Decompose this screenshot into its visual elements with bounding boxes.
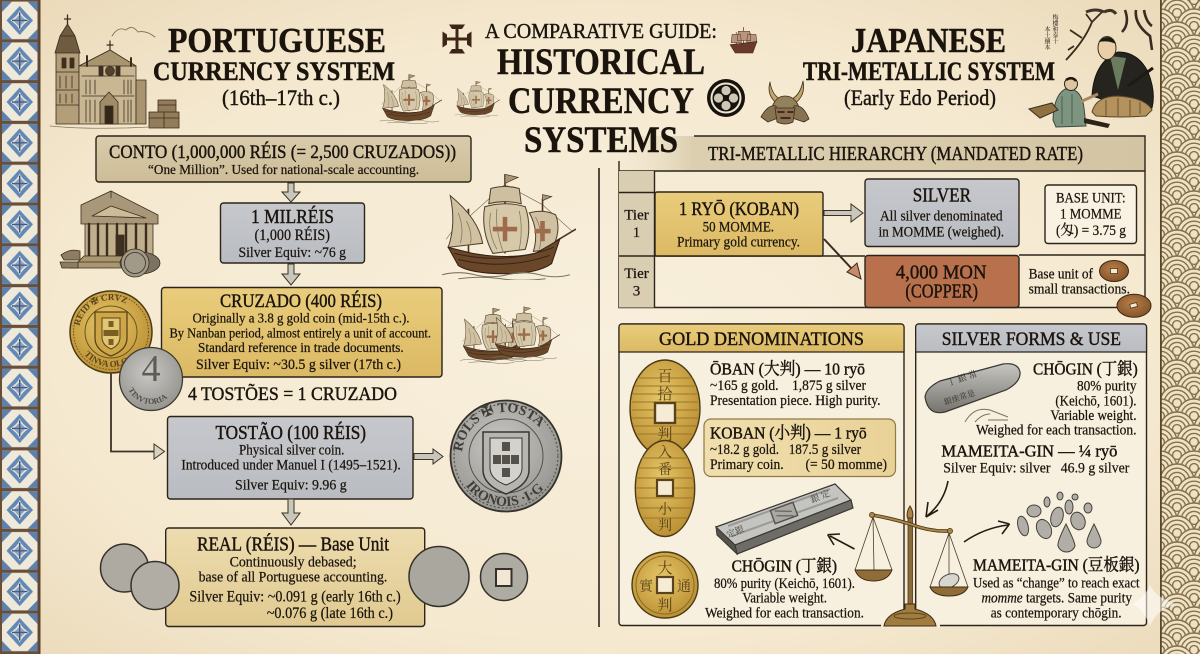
panel: conto: CONTO (1,000,000 RÉIS (= 2,500 CRUZADOS)) [109,141,456,163]
base unit box: BASE UNIT: [1056,190,1126,206]
icon: round gold coin: 實 [639,579,654,595]
silver box [865,179,1019,246]
tier column [619,171,1145,308]
illustration: large caravel [442,174,576,280]
icon: chogin ingot: 丁 銀 常 [945,368,979,388]
tier column: 1 [633,225,640,241]
icon: worn real coin [409,546,469,606]
icon: chogin ingot [925,364,1020,413]
panel: real: Silver Equiv: ~0.091 g (early 16th c.) [189,589,401,606]
panel: real: ~0.076 g (late 16th c.) [267,605,393,622]
illustration: samurai and merchant ukiyo-e: 本土續本 [1043,25,1050,51]
text: mameita-gin quarter ryo: MAMEITA-GIN — ¼ ryō [941,441,1117,460]
title: Japanese tri-metallic system [803,21,1055,110]
base unit box [1045,185,1136,244]
illustration: samurai and merchant ukiyo-e [1029,10,1153,128]
icon: round gold coin [632,552,698,618]
copper note: small transactions. [1029,281,1130,297]
icon: gold cruzado coin: TINVA OLO [85,350,126,367]
title: Portuguese currency system: (16th–17th c.) [222,85,340,110]
arrow: conto to milreis [282,183,300,202]
text: oban [710,360,880,409]
copper note: Base unit of [1029,266,1093,282]
icon: small sailing ship [455,81,500,117]
text: mameita-gin: momme targets. Same purity [982,591,1133,607]
icon: copper mon coin [1100,260,1128,282]
icon: oban coin: 拾 [657,386,673,403]
text: chogin: Variable weight. [742,591,827,607]
icon: silver chogin bar [716,484,853,554]
main title: HISTORICAL [497,42,705,83]
panel: cruzado: Silver Equiv: ~30.5 g silver (17th c.) [196,357,401,373]
gold panel header: GOLD DENOMINATIONS [659,329,864,350]
text: chogin [705,557,864,621]
base unit box: (匁) = 3.75 g [1056,222,1126,239]
silver panel header [916,324,1146,352]
callout: koban: (= 50 momme) [806,457,887,473]
gold panel header [619,324,904,352]
arrow: scale to silver beads [964,521,1010,542]
text: mameita-gin [973,556,1140,621]
panel: cruzado: CRUZADO (400 RÉIS) [220,290,382,312]
text: chogin: Weighed for each transaction. [705,605,864,621]
icon: chogin ingot: 銀座常是 [943,388,976,407]
panel: tostao: Introduced under Manuel I (1495–1521). [181,458,401,474]
panel: cruzado: Standard reference in trade documents. [198,341,404,356]
icon: koban coin [635,440,695,536]
tier column: Tier [624,266,649,282]
callout: koban: ~18.2 g gold. [710,442,779,458]
arrow: scale to chogin bar [828,534,854,549]
arrow: milreis to cruzado [282,264,300,285]
panel: real: base of all Portuguese accounting. [199,570,387,586]
left azulejo tile border [0,0,40,654]
panel: milreis: Silver Equiv: ~76 g [238,245,346,261]
panel: tostao: TOSTÃO (100 RÉIS) [216,420,366,444]
hierarchy header band: TRI-METALLIC HIERARCHY (MANDATED RATE) [708,143,1083,165]
icon: silver tostao coin: IRONOIS ·I·G [466,480,543,506]
icon: gold cruzado coin: REID ✠ CRVZ [74,294,128,326]
panel: real: Continuously debased; [230,555,357,571]
panel: milreis: 1 MILRÉIS [251,205,334,228]
icon: oban coin: 判 [657,426,673,443]
copper box: 4,000 MON [896,261,986,283]
main title: CURRENCY [508,81,694,122]
panel: silver forms and use [916,324,1146,626]
panel: milreis [220,203,364,263]
panel: gold denominations [619,324,904,626]
icon: copper mon coin lower [1117,294,1151,317]
text: mameita-gin: Used as “change” to reach exact [973,575,1140,591]
icon: four-tostoes silver coin [118,346,184,412]
arrow: gold to silver [824,204,863,222]
text: chogin silver: Variable weight. [1050,408,1136,424]
tier 1 gold koban box: Primary gold currency. [677,235,800,251]
main title: A COMPARATIVE GUIDE: [485,19,717,43]
icon: Japanese mon crest [707,79,745,117]
arrow: tostao to real [282,499,300,525]
callout: koban: Primary coin. [710,457,784,473]
icon: square-holed coin [480,554,528,600]
icon: round gold coin: 判 [657,597,673,614]
icon: cross of the Order of Christ [442,24,472,54]
panel: conto: “One Million”. Used for national-scale accounting. [148,163,419,178]
panel: real: REAL (RÉIS) — Base Unit [197,533,389,556]
title: Japanese tri-metallic system: TRI-METALLIC SYSTEM [803,57,1055,86]
text: chogin silver: CHŌGIN (丁銀) [1033,360,1138,379]
tier 1 gold koban box: 1 RYŌ (KOBAN) [679,199,799,220]
text: mameita-gin: as contemporary chōgin. [991,605,1122,621]
icon: pair of real coins [100,544,179,610]
text: oban: Presentation piece. High purity. [710,393,880,409]
main title: SYSTEMS [524,120,678,161]
callout: koban: KOBAN (小判) — 1 ryō [710,423,867,442]
text: chogin silver [976,360,1138,439]
base unit box: 1 MOMME [1060,207,1122,223]
text: chogin: CHŌGIN (丁銀) [732,557,837,576]
illustration: samurai and merchant ukiyo-e: 梅樓和泰十 [1051,13,1058,45]
text: oban: ŌBAN (大判) — 10 ryō [710,360,865,379]
tier 1 gold koban box [655,192,823,256]
tier column: Tier [624,207,649,223]
icon: gold cruzado coin [69,290,153,374]
panel: conto [96,136,471,182]
icon: koban coin: 入 [658,445,672,461]
panel: milreis: (1,000 RÉIS) [254,225,330,244]
panel: cruzado: Originally a 3.8 g gold coin (mid-15th c.). [192,312,410,327]
hierarchy header band [619,136,1145,308]
icon: round gold coin: 大 [657,560,673,577]
icon: mameita-gin silver beads [1016,492,1101,552]
silver panel header: SILVER FORMS & USE [942,329,1121,350]
icon: silver tostao coin: ROLS ✠ TOSTA [453,402,543,452]
illustration: Portuguese church [50,15,179,128]
right seigaiha wave border [1160,0,1200,654]
text: 4 tostoes equals 1 cruzado: 4 TOSTÕES = 1 CRUZADO [188,383,397,405]
tier column: 3 [633,284,640,300]
arrow: tostao to silver coin [414,449,443,464]
arrow: gold to copper [824,239,861,279]
panel: tostao [168,416,413,499]
copper box: (COPPER) [905,280,978,302]
title: Portuguese currency system: CURRENCY SYSTEM [153,57,395,86]
icon: red-sailed ship [730,27,757,53]
illustration: bank building and coins [60,191,160,277]
callout: koban: 187.5 g silver [789,442,861,458]
silver box: in MOMME (weighed). [879,225,1004,241]
title: Portuguese currency system [153,21,395,110]
arrow: note to scale [926,481,948,517]
tier 1 gold koban box: 50 MOMME. [703,220,774,236]
callout: koban [704,419,896,476]
icon: silver chogin bar: 銀 定 [809,487,832,505]
title: Portuguese currency system: PORTUGUESE [168,21,386,60]
panel: real [166,528,425,626]
title: Japanese tri-metallic system: JAPANESE [851,21,1006,60]
central divider line [598,168,600,627]
icon: silver chogin bar: 定銀 [725,523,745,540]
icon: koban coin: 番 [658,462,672,478]
icon: four-tostoes silver coin: 4 [142,348,160,390]
panel: cruzado: By Nanban period, almost entirely a unit of account. [170,326,431,341]
copper box [865,256,1019,308]
silver box: All silver denominated [880,209,1003,225]
illustration: balance scale [855,506,968,628]
illustration: pair of ships [460,307,560,363]
icon: small sketch below ingot [965,409,1008,422]
main title [485,19,717,161]
icon: round gold coin: 通 [677,579,691,595]
arrow: cruzado coin to tostao [111,372,164,459]
icon: oban coin: 百 [657,368,673,385]
panel: tri-metallic hierarchy [619,136,1151,317]
icon: samurai kabuto helmet [761,81,809,124]
icon: koban coin: 判 [658,518,672,534]
icon: small caravel [380,74,442,124]
text: chogin: 80% purity (Keichō, 1601). [714,576,855,592]
watermark sparkle [1133,585,1176,626]
text: chogin silver: Weighed for each transaction. [976,423,1136,439]
icon: silver tostao coin [450,400,562,512]
copper note [1029,266,1130,297]
text: mameita-gin: MAMEITA-GIN (豆板銀) [973,556,1140,575]
icon: koban coin: 小 [658,502,673,518]
text: chogin silver: (Keichō, 1601). [1055,394,1136,410]
title: Japanese tri-metallic system: (Early Edo Period) [844,85,996,110]
panel: cruzado [162,288,442,377]
text: mameita-gin quarter ryo [941,441,1129,476]
silver box: SILVER [913,185,972,207]
text: chogin silver: 80% purity [1077,379,1137,395]
panel: tostao: Silver Equiv: 9.96 g [235,478,347,494]
text: mameita-gin quarter ryo: Silver Equiv: silver 46.9 g silver [943,460,1129,476]
text: oban: ~165 g gold. 1,875 g silver [710,378,866,394]
panel: tostao: Physical silver coin. [239,443,344,459]
icon: four-tostoes silver coin: TINVTORIA [129,387,168,404]
icon: oban coin [630,360,700,456]
